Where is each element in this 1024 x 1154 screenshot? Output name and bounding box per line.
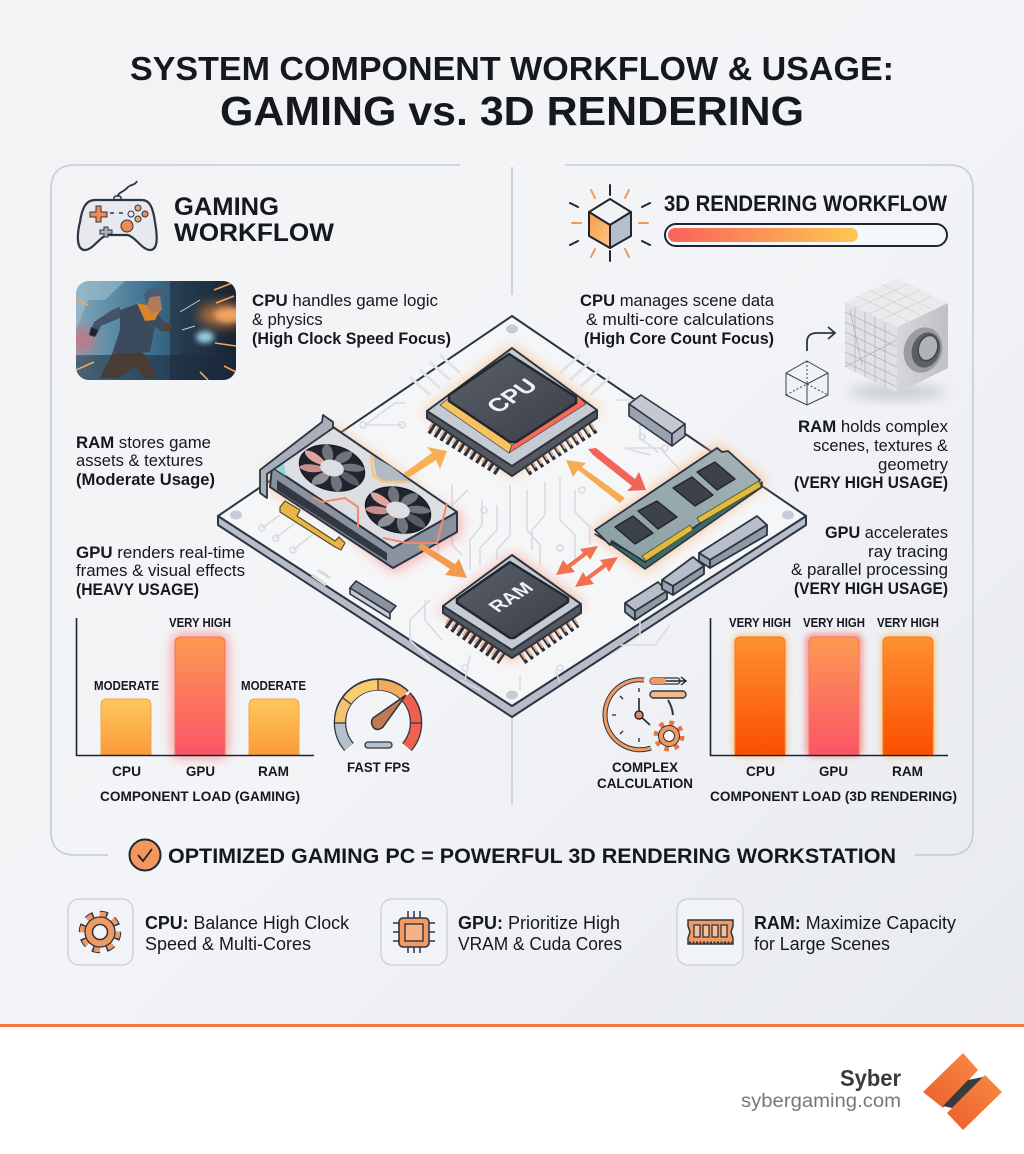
text: RAM rendering [794, 418, 949, 492]
text: GPU rendering [791, 524, 948, 598]
heading: 3D rendering workflow: 3D RENDERING WORKFLOW [664, 191, 947, 216]
render shadow [849, 384, 945, 400]
bar: CPU [101, 699, 151, 755]
text: GPU rendering: (VERY HIGH USAGE) [794, 580, 948, 598]
arrow GPU to RAM [418, 543, 467, 578]
CPU base underside [427, 411, 597, 476]
text: CPU gaming: (High Clock Speed Focus) [252, 330, 451, 348]
icon: 3D model render [786, 278, 948, 405]
expansion slots [625, 516, 767, 620]
stick underside [595, 482, 762, 569]
text: CPU rendering [580, 292, 775, 348]
value labels: VERY HIGH [877, 616, 939, 630]
text: GPU gaming: GPU renders real-time [76, 544, 245, 562]
bar: GPU [809, 637, 859, 755]
bar: RAM [249, 699, 299, 755]
axis labels [112, 763, 289, 779]
tip: CPU [68, 899, 350, 965]
RAM label: RAM [484, 579, 539, 616]
CPU top face [449, 354, 576, 442]
panel outline [51, 165, 973, 855]
tip text [458, 913, 622, 954]
title: GAMING vs. 3D RENDERING [220, 88, 804, 134]
text: GPU gaming: (HEAVY USAGE) [76, 581, 199, 599]
game screenshot [76, 281, 236, 380]
value labels: MODERATE [94, 679, 159, 693]
bar glows [733, 633, 935, 757]
footer background [0, 1027, 1024, 1154]
text: CPU rendering: (High Core Count Focus) [584, 330, 774, 348]
title: SYSTEM COMPONENT WORKFLOW & USAGE: [130, 50, 894, 87]
value labels: VERY HIGH [729, 616, 791, 630]
solid cube [897, 303, 948, 393]
RAM base [443, 555, 581, 650]
CPU pins [431, 424, 594, 470]
RAM top face [457, 562, 568, 638]
board base [218, 516, 806, 717]
tip text [754, 913, 956, 954]
GPU bar glow [172, 634, 228, 758]
text: RAM gaming: RAM stores game [76, 434, 211, 452]
gold fingers [280, 501, 345, 550]
axis labels: RAM [258, 763, 289, 779]
text: CPU gaming: CPU handles game logic [252, 292, 438, 310]
tip text: for Large Scenes [754, 934, 890, 954]
arrows between components [404, 447, 646, 587]
RAM glow [438, 552, 585, 662]
text: RAM rendering: RAM holds complex [798, 418, 949, 436]
icon: glowing cube [570, 185, 650, 261]
footer [0, 1024, 1024, 1154]
icon: complex calculation [597, 677, 693, 791]
RAM stick [590, 444, 768, 572]
tip text: CPU: Balance High Clock [145, 913, 350, 933]
calculation label: COMPLEX [612, 759, 679, 775]
tip text [145, 913, 350, 954]
double arrow upper [556, 546, 598, 575]
CPU base [427, 348, 597, 466]
text: RAM gaming: (Moderate Usage) [76, 471, 215, 489]
chart title: COMPONENT LOAD (GAMING) [100, 788, 300, 804]
value labels [94, 616, 306, 693]
axis labels: GPU [186, 763, 215, 779]
tip: RAM [677, 899, 956, 965]
screw holes [230, 324, 794, 700]
footer rule [0, 1024, 1024, 1027]
stick glow [590, 444, 768, 572]
icon: game controller [78, 181, 157, 250]
icon: memory module [688, 920, 733, 944]
icon: check badge [130, 840, 160, 870]
icon: processor [393, 911, 435, 953]
board top [218, 316, 806, 706]
text: GPU gaming: frames & visual effects [76, 562, 245, 580]
gold contacts [642, 481, 761, 561]
text: GPU rendering: ray tracing [868, 543, 948, 561]
CPU label: CPU [481, 375, 543, 417]
icon: gear [82, 914, 118, 950]
GPU side [270, 467, 457, 568]
text: RAM rendering: geometry [878, 456, 949, 474]
RAM chip [438, 552, 585, 662]
stick board [595, 448, 760, 562]
bar: CPU [735, 637, 785, 755]
memory chips [615, 462, 735, 544]
top-right slot [629, 395, 685, 446]
value labels: VERY HIGH [803, 616, 865, 630]
left small connector [350, 581, 396, 619]
bar: RAM [883, 637, 933, 755]
left panel heading: WORKFLOW [174, 219, 334, 247]
axis labels [746, 763, 923, 779]
CPU chip [422, 344, 602, 478]
GPU top shroud [272, 427, 457, 548]
RAM pins [448, 619, 576, 659]
progress bar [665, 224, 947, 246]
mesh lines [845, 284, 932, 387]
circuit traces [259, 355, 680, 690]
heat spreader stripe [440, 398, 512, 453]
title [130, 50, 894, 134]
text: GPU rendering: & parallel processing [791, 561, 948, 579]
brand url: sybergaming.com [741, 1091, 901, 1112]
value labels: MODERATE [241, 679, 306, 693]
text: CPU gaming [252, 292, 451, 348]
GPU card [260, 415, 462, 573]
text: RAM rendering: (VERY HIGH USAGE) [794, 474, 948, 492]
brand name: Syber [840, 1065, 901, 1091]
icon: speed gauge [334, 679, 422, 775]
bar chart: gaming load [76, 616, 314, 804]
logo [923, 1053, 1002, 1130]
left panel heading [78, 181, 334, 250]
text: CPU rendering: CPU manages scene data [580, 292, 775, 310]
value labels: VERY HIGH [169, 616, 231, 630]
text: GPU gaming [76, 544, 245, 599]
tip text: RAM: Maximize Capacity [754, 913, 956, 933]
curved arrow [807, 327, 835, 351]
RAM base underside [443, 606, 581, 658]
text: CPU gaming: & physics [252, 311, 323, 329]
value labels [729, 616, 939, 630]
bar: GPU [175, 637, 225, 755]
text: RAM gaming: assets & textures [76, 452, 203, 470]
right panel heading [570, 185, 947, 261]
tip text: GPU: Prioritize High [458, 913, 620, 933]
axes [76, 618, 314, 756]
wireframe cube [786, 361, 828, 405]
fans [296, 441, 368, 495]
chart title: COMPONENT LOAD (3D RENDERING) [710, 788, 957, 804]
arrow RAM to CPU [566, 460, 625, 503]
conclusion banner [130, 840, 896, 870]
axis labels: RAM [892, 763, 923, 779]
bracket [260, 415, 333, 498]
tip text: VRAM & Cuda Cores [458, 934, 622, 954]
tip text: Speed & Multi-Cores [145, 934, 311, 954]
figure [182, 350, 191, 355]
text: GPU rendering: GPU accelerates [825, 524, 948, 542]
axis labels: CPU [112, 763, 141, 779]
CPU glow [422, 344, 602, 478]
double arrow lower [575, 557, 618, 587]
GPU glow [262, 425, 420, 545]
arrow GPU to CPU [404, 447, 447, 478]
text: RAM gaming [76, 434, 215, 489]
text: RAM rendering: scenes, textures & [813, 437, 948, 455]
gauge label: FAST FPS [347, 759, 410, 775]
text: CPU rendering: & multi-core calculations [586, 311, 774, 329]
arrow CPU to RAM [588, 448, 646, 491]
axis labels: GPU [819, 763, 848, 779]
motherboard [218, 316, 806, 717]
bar chart: rendering load [710, 616, 957, 804]
axis labels: CPU [746, 763, 775, 779]
lens [898, 322, 948, 378]
calculation label [597, 759, 693, 791]
tip: GPU [381, 899, 622, 965]
heading: gaming workflow: GAMING [174, 193, 279, 221]
banner text: OPTIMIZED GAMING PC = POWERFUL 3D RENDERING WORKSTATION [168, 845, 896, 868]
axes [710, 618, 948, 756]
calculation label: CALCULATION [597, 775, 693, 791]
